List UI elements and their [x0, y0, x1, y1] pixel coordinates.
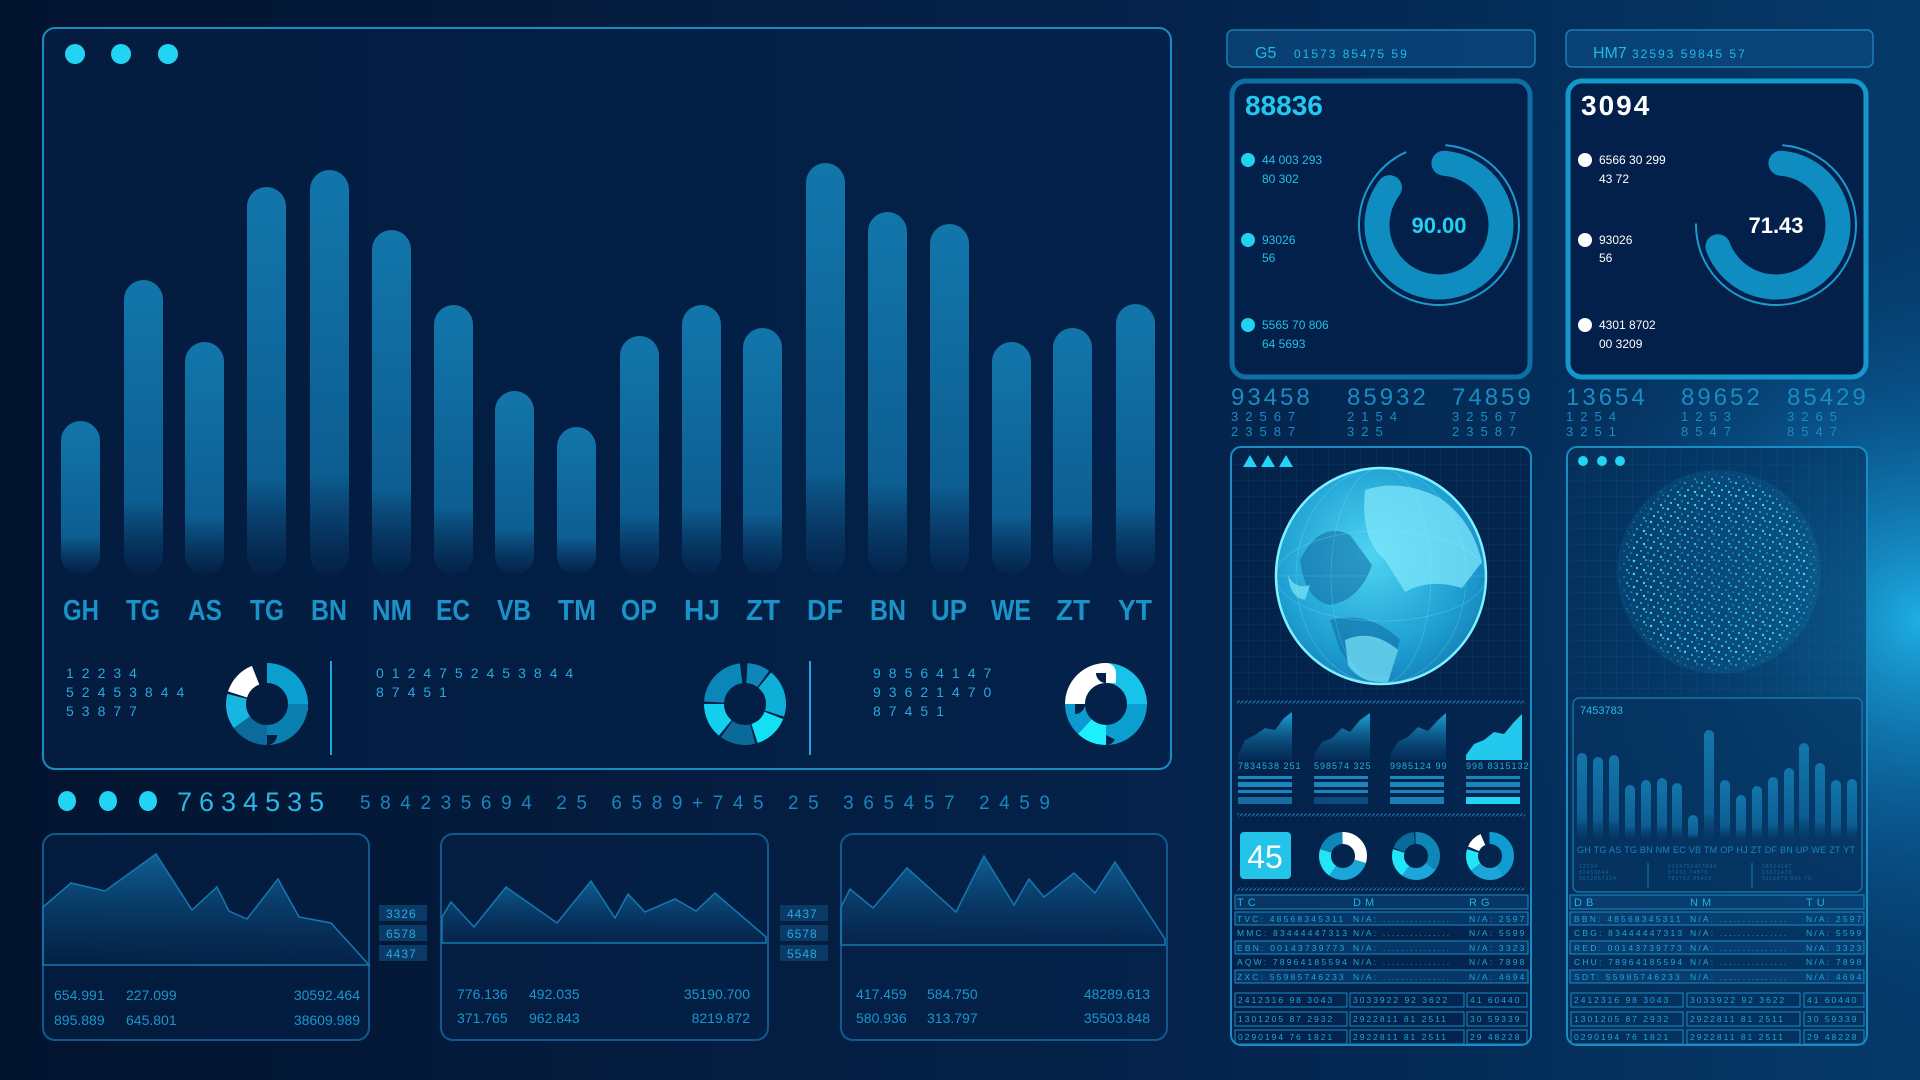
table right: N/A: 4694 — [1806, 972, 1864, 982]
bar labels: AS — [188, 595, 222, 627]
table right: N/A: ............... — [1690, 972, 1788, 982]
table right: 2922811 81 2511 — [1690, 1014, 1785, 1024]
particle sphere — [1617, 470, 1821, 674]
number block right: 1253 — [1681, 409, 1738, 424]
panel: area chart 1: 227.099 — [126, 987, 177, 1003]
card: 3094 gauge: 6566 30 299 — [1599, 153, 1666, 167]
stats row text: 12234 — [66, 665, 145, 681]
mini bar chart: 52453844 — [1579, 870, 1609, 876]
bar labels: ZT — [1056, 595, 1090, 627]
table left: N/A: ............... — [1353, 972, 1451, 982]
table left: 1301205 87 2932 — [1238, 1014, 1334, 1024]
card: 88836 gauge: 93026 — [1262, 233, 1296, 247]
number block left: 2154 — [1347, 409, 1404, 424]
panel: area chart 3: 313.797 — [927, 1010, 978, 1026]
number block left: 325 — [1347, 424, 1390, 439]
bar labels: HJ — [684, 595, 720, 627]
panel: area chart 3 — [841, 834, 1167, 1040]
number block right — [1566, 384, 1869, 439]
table left: N/A: 4694 — [1469, 972, 1527, 982]
table left: N/A: 2597 — [1469, 914, 1527, 924]
table right: 2922811 81 2511 — [1690, 1032, 1785, 1042]
bar labels — [63, 595, 1152, 627]
table right: 3033922 92 3622 — [1690, 995, 1786, 1005]
bar labels: TG — [126, 595, 160, 627]
gauge 90.00 — [1352, 138, 1526, 312]
table left — [1235, 895, 1528, 1044]
number block right: 89652 — [1681, 384, 1763, 411]
card: 88836 gauge: 80 302 — [1262, 172, 1299, 186]
panel: area chart 1: 38609.989 — [294, 1012, 360, 1028]
panel: area chart 3: 35503.848 — [1084, 1010, 1150, 1026]
table left: 0290194 76 1821 — [1238, 1032, 1334, 1042]
mini charts: 598574 325 — [1314, 761, 1372, 771]
table left: 29 48228 — [1470, 1032, 1521, 1042]
mini bar chart: 98564147 — [1762, 864, 1792, 870]
side labels 1: 3326 — [386, 907, 417, 921]
table left: EBN: 00143739773 — [1237, 943, 1346, 953]
card: 88836 gauge: 90.00 — [1411, 213, 1467, 238]
number block right: 3251 — [1566, 424, 1623, 439]
card: 3094 gauge: 56 — [1599, 251, 1613, 265]
table right — [1570, 895, 1864, 1044]
table right: N/A: 7898 — [1806, 957, 1864, 967]
card: 88836 gauge — [1232, 81, 1530, 377]
table right: 0290194 76 1821 — [1574, 1032, 1670, 1042]
panel: area chart 1: 645.801 — [126, 1012, 177, 1028]
table left: 2412316 98 3043 — [1238, 995, 1334, 1005]
card: 3094 gauge: 43 72 — [1599, 172, 1629, 186]
donut 3 — [1075, 673, 1137, 735]
card: 88836 gauge: 44 003 293 — [1262, 153, 1322, 167]
number block right: 3265 — [1787, 409, 1844, 424]
panel: particle sphere dashboard — [1567, 447, 1867, 1045]
stats row text: 52453844 — [66, 684, 192, 700]
icon: triangles — [1243, 455, 1293, 467]
panel: area chart 3: 580.936 — [856, 1010, 907, 1026]
table left: 30 59339 — [1470, 1014, 1521, 1024]
table right: DB — [1574, 897, 1597, 909]
badge 45: 45 — [1247, 839, 1283, 875]
bar labels: WE — [991, 595, 1031, 627]
table right: N/A: 3323 — [1806, 943, 1864, 953]
mini bar chart: 87451 74873 — [1668, 870, 1708, 876]
number block left: 23587 — [1452, 424, 1523, 439]
table right: N/A: 2597 — [1806, 914, 1864, 924]
number block left: 32567 — [1452, 409, 1523, 424]
header bar: G5: 01573 85475 59 — [1294, 47, 1409, 61]
table right: 2412316 98 3043 — [1574, 995, 1670, 1005]
table left: N/A: ............... — [1353, 943, 1451, 953]
card: 3094 gauge — [1568, 81, 1866, 377]
bar labels: DF — [807, 595, 843, 627]
table right: BBN: 48568345311 — [1574, 914, 1683, 924]
table left: N/A: ............... — [1353, 928, 1451, 938]
table right: SDT: 55985746233 — [1574, 972, 1682, 982]
side labels 2: 4437 — [787, 907, 818, 921]
bar labels: VB — [497, 595, 531, 627]
table left: RG — [1469, 897, 1494, 909]
table left: TC — [1237, 897, 1260, 909]
bar labels: YT — [1118, 595, 1152, 627]
bar labels: OP — [621, 595, 657, 627]
table left: N/A: 7898 — [1469, 957, 1527, 967]
mini bar chart: 93621470 — [1762, 870, 1792, 876]
card: 3094 gauge: 93026 — [1599, 233, 1633, 247]
number block left: 23587 — [1231, 424, 1302, 439]
ticker line: 7634535 — [177, 787, 331, 817]
table right: CHU: 78964185594 — [1574, 957, 1684, 967]
panel: globe dashboard — [1231, 447, 1531, 1045]
stats row text — [66, 665, 999, 719]
card: 3094 gauge: 00 3209 — [1599, 337, 1643, 351]
table right: 41 60440 — [1807, 995, 1858, 1005]
number block left: 85932 — [1347, 384, 1429, 411]
side labels 1: 4437 — [386, 947, 417, 961]
mini charts: 9985124 99 — [1390, 761, 1448, 771]
mini charts: 998 8315132 — [1466, 761, 1530, 771]
panel: area chart 2: 492.035 — [529, 986, 580, 1002]
number block left — [1231, 384, 1534, 439]
table right: 29 48228 — [1807, 1032, 1858, 1042]
bar labels: BN — [311, 595, 347, 627]
number block left: 74859 — [1452, 384, 1534, 411]
table left: MMC: 83444447313 — [1237, 928, 1349, 938]
gauge 71.43 — [1689, 138, 1863, 312]
table left: 41 60440 — [1470, 995, 1521, 1005]
panel: area chart 3: 48289.613 — [1084, 986, 1150, 1002]
number block right: 13654 — [1566, 384, 1648, 411]
table left: AQW: 78964185594 — [1237, 957, 1349, 967]
bar labels: EC — [436, 595, 470, 627]
table left: N/A: ............... — [1353, 957, 1451, 967]
mini bar chart: 0124752453844 — [1668, 864, 1717, 870]
card: 88836 gauge: 5565 70 806 — [1262, 318, 1329, 332]
stats row text: 53877 — [66, 703, 145, 719]
number block right: 85429 — [1787, 384, 1869, 411]
panel: area chart 2: 776.136 — [457, 986, 508, 1002]
panel: area chart 2: 35190.700 — [684, 986, 750, 1002]
table right: N/A: ............... — [1690, 928, 1788, 938]
panel: area chart 3: 584.750 — [927, 986, 978, 1002]
table left: DM — [1353, 897, 1378, 909]
number block left: 32567 — [1231, 409, 1302, 424]
small donuts — [1325, 838, 1508, 874]
table right: N/A: ............... — [1690, 943, 1788, 953]
header bar: HM7: HM7 — [1593, 45, 1627, 62]
stats row text: 0124752453844 — [376, 665, 581, 681]
mini charts: 7834538 251 — [1238, 761, 1302, 771]
stats row text: 93621470 — [873, 684, 999, 700]
bar labels: TM — [558, 595, 596, 627]
panel: area chart 2: 371.765 — [457, 1010, 508, 1026]
bar chart — [61, 163, 1155, 575]
table left: TVC: 48568345311 — [1237, 914, 1345, 924]
table right: N/A: ............... — [1690, 957, 1788, 967]
card: 3094 gauge: 71.43 — [1748, 213, 1804, 238]
number block left: 93458 — [1231, 384, 1313, 411]
card: 88836 gauge: 56 — [1262, 251, 1276, 265]
donut 1 — [236, 673, 298, 735]
table right: NM — [1690, 897, 1715, 909]
table left: ZXC: 55985746233 — [1237, 972, 1346, 982]
mini bar chart: 7453783 — [1580, 705, 1623, 717]
stats row text: 98564147 — [873, 665, 999, 681]
panel: area chart 1: 654.991 — [54, 987, 105, 1003]
mini bar chart: 8832867234 — [1579, 876, 1617, 882]
panel: main bar chart — [43, 28, 1171, 769]
mini charts — [1238, 712, 1530, 804]
card: 88836 gauge: 88836 — [1245, 90, 1323, 121]
stats row text: 87451 — [376, 684, 455, 700]
table left: 2922811 81 2511 — [1353, 1014, 1448, 1024]
bar labels: UP — [931, 595, 967, 627]
side labels 2 — [780, 905, 828, 961]
card: 3094 gauge: 3094 — [1581, 90, 1651, 121]
bar labels: TG — [250, 595, 284, 627]
panel: area chart 2: 8219.872 — [692, 1010, 750, 1026]
table left: 2922811 81 2511 — [1353, 1032, 1448, 1042]
ticker line: 584235694 25 6589+745 25 365457 2459 — [360, 793, 1050, 814]
header bar: G5 — [1227, 30, 1535, 67]
bar labels: NM — [372, 595, 412, 627]
table left: N/A: 3323 — [1469, 943, 1527, 953]
panel: area chart 1: 30592.464 — [294, 987, 360, 1003]
side labels 2: 5548 — [787, 947, 818, 961]
globe — [1276, 468, 1486, 684]
card: 3094 gauge: 4301 8702 — [1599, 318, 1656, 332]
mini bar chart: GH TG AS TG BN NM EC VB TM OP HJ ZT DF BN UP WE ZT YT — [1577, 845, 1856, 855]
number block right: 8547 — [1787, 424, 1844, 439]
bar labels: ZT — [746, 595, 780, 627]
panel: area chart 2: 962.843 — [529, 1010, 580, 1026]
table right: N/A: 5599 — [1806, 928, 1864, 938]
number block right: 1254 — [1566, 409, 1623, 424]
table right: RED: 00143739773 — [1574, 943, 1684, 953]
bar labels: GH — [63, 595, 99, 627]
ticker line — [58, 787, 1050, 817]
table left: N/A: 5599 — [1469, 928, 1527, 938]
window dots — [65, 44, 178, 64]
table right: N/A: ............... — [1690, 914, 1788, 924]
badge 45 — [1240, 832, 1291, 879]
table right: TU — [1806, 897, 1829, 909]
number block right: 8547 — [1681, 424, 1738, 439]
header bar: HM7: 32593 59845 57 — [1632, 47, 1747, 61]
panel: area chart 2 — [441, 834, 768, 1040]
panel: area chart 3: 417.459 — [856, 986, 907, 1002]
panel: area chart 1: 895.889 — [54, 1012, 105, 1028]
table left: 3033922 92 3622 — [1353, 995, 1449, 1005]
mini bar chart: 3116878 894 73 — [1762, 876, 1812, 882]
side labels 1: 6578 — [386, 927, 417, 941]
mini bar chart — [1573, 698, 1862, 892]
card: 88836 gauge: 64 5693 — [1262, 337, 1306, 351]
icon: dots — [1578, 456, 1625, 466]
table right: 30 59339 — [1807, 1014, 1858, 1024]
side labels 2: 6578 — [787, 927, 818, 941]
bar labels: BN — [870, 595, 906, 627]
header bar: HM7 — [1566, 30, 1873, 67]
table right: 1301205 87 2932 — [1574, 1014, 1670, 1024]
table right: CBG: 83444447313 — [1574, 928, 1684, 938]
header bar: G5: G5 — [1255, 45, 1276, 62]
panel: area chart 1 — [43, 834, 369, 1040]
mini bar chart: 783753 85463 — [1668, 876, 1712, 882]
donut 2 — [714, 673, 776, 735]
table left: N/A: ............... — [1353, 914, 1451, 924]
stats row text: 87451 — [873, 703, 952, 719]
mini bar chart: 12234 — [1579, 864, 1598, 870]
side labels 1 — [379, 905, 427, 961]
